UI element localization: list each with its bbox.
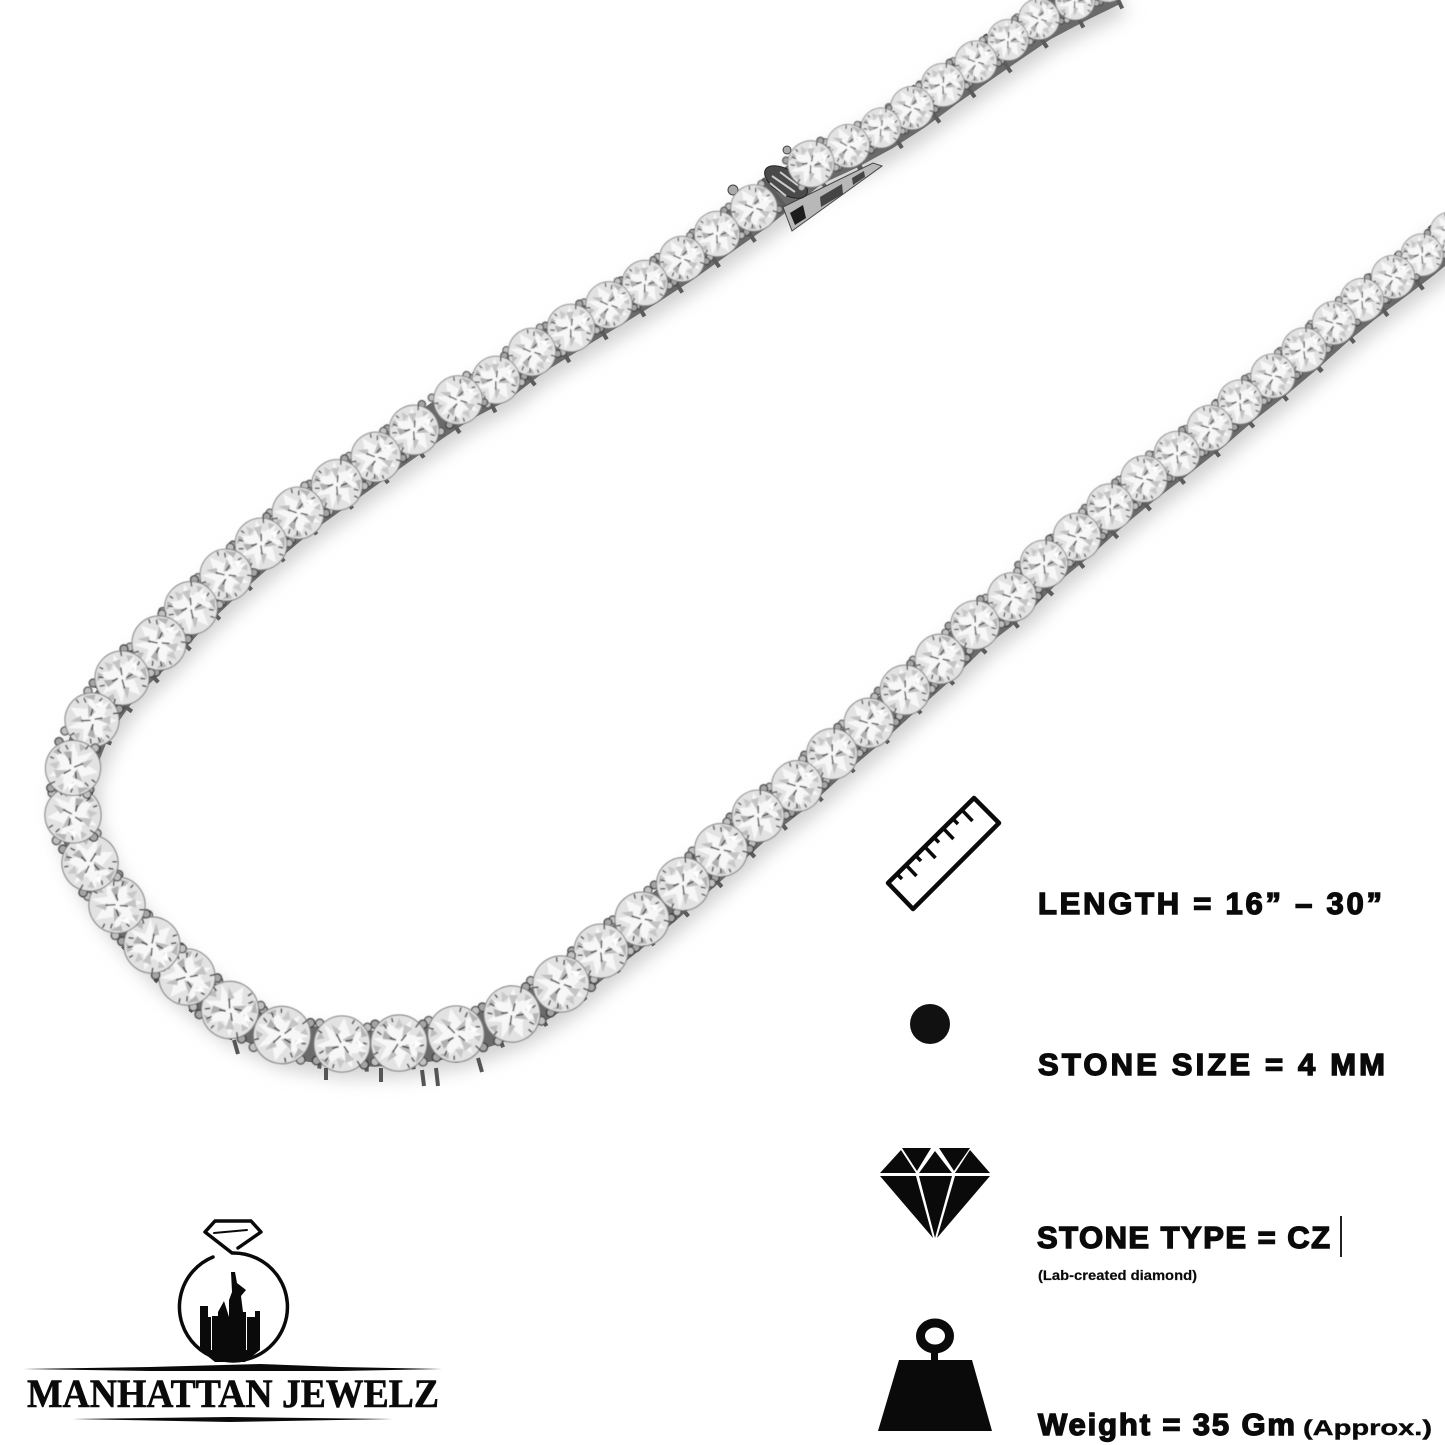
curve and lower strand stones [41, 204, 1445, 1074]
bottom prong pins [234, 1040, 482, 1086]
logo: Manhattan Jewelz [23, 1221, 442, 1422]
logo top rule [23, 1364, 442, 1371]
weight label [1038, 1407, 1432, 1442]
stone type label: STONE TYPE = CZ [1037, 1220, 1330, 1255]
logo skyline with statue [200, 1272, 260, 1362]
tennis necklace photo [41, 0, 1445, 1086]
stone size label: STONE SIZE = 4 MM [1038, 1047, 1385, 1082]
logo wordmark: MANHATTAN JEWELZ [27, 1371, 439, 1416]
necklace shadow [78, 0, 1445, 1056]
stone type note: (Lab-created diamond) [1038, 1267, 1197, 1283]
weight label: Weight = 35 Gm [1038, 1407, 1295, 1442]
icon: stone size dot [910, 1004, 950, 1044]
logo ring and diamond [179, 1221, 287, 1361]
length label: LENGTH = 16” – 30” [1038, 886, 1382, 921]
icon: ruler [888, 798, 999, 909]
logo bottom rule [72, 1417, 393, 1422]
necklace metal band [75, 0, 1445, 1049]
necklace setting posts [75, 0, 1445, 1049]
icon: weight [878, 1323, 992, 1431]
clasp [728, 146, 882, 231]
icon: diamond [880, 1148, 990, 1238]
weight label: (Approx.) [1303, 1417, 1432, 1440]
text cursor bar [1340, 1216, 1342, 1257]
upper strand stones [55, 0, 1135, 757]
